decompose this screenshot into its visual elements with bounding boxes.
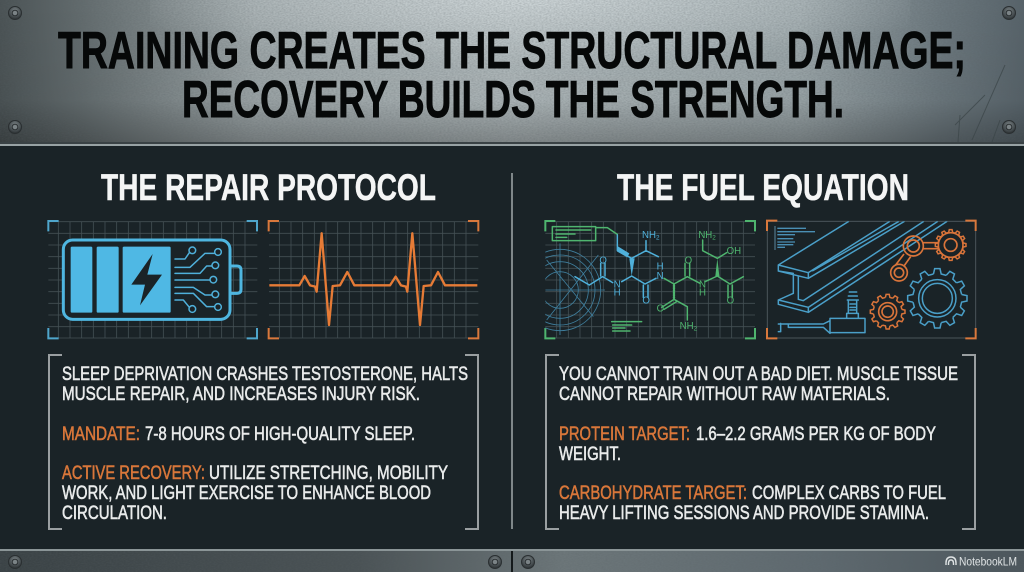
panel: molecule diagram: H <box>657 261 664 272</box>
text panel: repair protocol: ACTIVE RECOVERY: <box>62 463 205 484</box>
panel: molecule diagram: H <box>614 288 621 299</box>
text panel: fuel equation: 1.6–2.2 GRAMS PER KG OF BODY <box>696 424 936 445</box>
text panel: fuel equation: WEIGHT. <box>559 444 621 465</box>
panel: molecule diagram: O <box>727 295 735 306</box>
text panel: fuel equation: COMPLEX CARBS TO FUEL <box>752 483 946 504</box>
panel: molecule diagram: O <box>657 304 665 315</box>
text panel: repair protocol: 7-8 HOURS OF HIGH-QUALITY SLEEP. <box>145 424 415 445</box>
panel: heartbeat chart <box>269 221 478 338</box>
text panel: repair protocol: CIRCULATION. <box>62 503 167 524</box>
text panel: repair protocol <box>49 355 478 529</box>
panel: molecule diagram: O <box>685 255 693 266</box>
text panel: repair protocol: MUSCLE REPAIR, AND INCREASES INJURY RISK. <box>62 384 420 405</box>
panel: molecule diagram: NH <box>698 230 712 241</box>
panel: steel beam and gears <box>767 221 976 338</box>
text panel: repair protocol: WORK, AND LIGHT EXERCISE TO ENHANCE BLOOD <box>62 483 431 504</box>
text panel: fuel equation: CANNOT REPAIR WITHOUT RAW MATERIALS. <box>559 384 890 405</box>
panel: molecule diagram: N <box>614 280 621 291</box>
text panel: fuel equation: PROTEIN TARGET: <box>559 424 690 445</box>
panel: molecule diagram <box>519 221 755 338</box>
panel: molecule diagram: N <box>657 271 664 282</box>
panel: molecule diagram: NH <box>642 230 656 241</box>
header metal plate <box>0 0 1024 146</box>
text panel: fuel equation <box>546 355 975 529</box>
center divider <box>511 173 513 529</box>
panel: battery icon <box>48 221 257 338</box>
text panel: fuel equation: HEAVY LIFTING SESSIONS AND PROVIDE STAMINA. <box>559 503 929 524</box>
title <box>58 21 966 128</box>
panel: molecule diagram: O <box>599 255 607 266</box>
panel: molecule diagram: O <box>642 295 650 306</box>
heading: the repair protocol: THE REPAIR PROTOCOL <box>101 167 436 208</box>
footer metal plate <box>0 549 1024 572</box>
panel: molecule diagram: NH <box>680 321 694 332</box>
heading: the fuel equation: THE FUEL EQUATION <box>617 167 909 208</box>
panel: molecule diagram: 2 <box>656 235 660 242</box>
panel: molecule diagram: H <box>699 288 706 299</box>
text panel: fuel equation: CARBOHYDRATE TARGET: <box>559 483 747 504</box>
text panel: repair protocol: MANDATE: <box>62 424 140 445</box>
text panel: repair protocol: UTILIZE STRETCHING, MOBILITY <box>209 463 448 484</box>
panel: molecule diagram: 2 <box>694 326 698 333</box>
panel: molecule diagram: N <box>699 279 706 290</box>
panel: molecule diagram: 2 <box>712 235 716 242</box>
panel: molecule diagram: OH <box>727 246 741 257</box>
text panel: repair protocol: SLEEP DEPRIVATION CRASHES TESTOSTERONE, HALTS <box>62 364 468 385</box>
header rivets <box>8 6 1016 134</box>
